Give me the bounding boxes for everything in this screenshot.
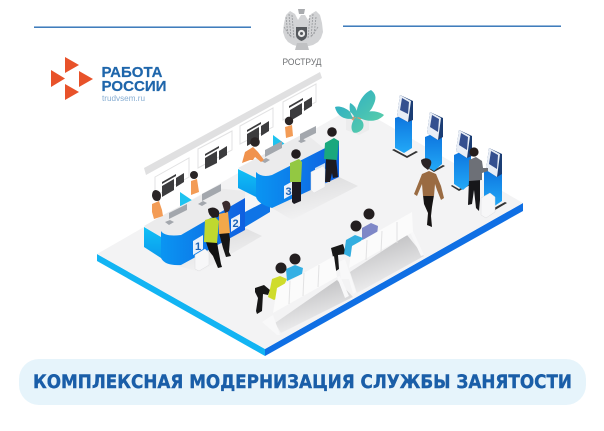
logo wordmark line 2: РОССИИ bbox=[102, 78, 166, 95]
kiosk 3 bbox=[451, 130, 472, 191]
bench 2 bbox=[331, 208, 424, 294]
clerk 4 bbox=[285, 117, 293, 138]
customer in lime bbox=[290, 149, 302, 204]
banner pill bbox=[19, 359, 586, 405]
floor platform bbox=[97, 106, 523, 356]
counter blue front bbox=[161, 198, 245, 265]
logo wordmark line 1: РАБОТА bbox=[102, 64, 163, 81]
logo: Работа России bbox=[51, 57, 166, 103]
bench back bbox=[349, 212, 413, 268]
gap blue strip bbox=[245, 199, 270, 227]
sign panel 1 bbox=[155, 158, 189, 197]
waiting stool bbox=[311, 166, 325, 193]
counter blue front bbox=[256, 141, 339, 208]
sign panel 4 bbox=[283, 84, 316, 121]
sitter in purple bbox=[362, 208, 378, 240]
customer in yellow bbox=[204, 208, 222, 268]
kiosk 4 bbox=[484, 148, 507, 210]
logo url: trudvsem.ru bbox=[102, 94, 145, 103]
kiosk stool bbox=[481, 193, 495, 218]
right counter bbox=[238, 126, 358, 220]
emblem label: РОСТРУД bbox=[282, 57, 322, 67]
customer in green bbox=[324, 127, 339, 182]
bench slats bbox=[366, 222, 397, 260]
kiosk 1 bbox=[392, 95, 418, 158]
isometric service hall bbox=[97, 72, 523, 356]
bench slats bbox=[289, 265, 319, 304]
icon: potted plant bbox=[335, 90, 384, 135]
bench back bbox=[273, 256, 337, 313]
walking man in brown bbox=[414, 158, 444, 227]
sign panel 2 bbox=[198, 131, 232, 169]
counter top surface bbox=[238, 133, 326, 178]
counter number 2: 2 bbox=[232, 218, 239, 230]
counter floor shadow bbox=[178, 228, 262, 272]
kiosks bbox=[392, 95, 507, 210]
monitors bbox=[261, 126, 316, 163]
counter top surface bbox=[144, 188, 245, 237]
gap panel bbox=[245, 184, 270, 212]
bench shadow bbox=[275, 280, 353, 333]
title banner bbox=[19, 359, 586, 405]
screen partition bbox=[273, 135, 293, 157]
top right rule bbox=[343, 26, 561, 27]
sitter in yellow bbox=[255, 262, 287, 314]
kiosk 2 bbox=[425, 112, 445, 172]
bench 1 bbox=[255, 254, 353, 335]
counter number 4: 4 bbox=[317, 166, 323, 177]
sitter in cyan bbox=[286, 254, 303, 281]
wall shelf bbox=[144, 72, 322, 175]
bench shadow bbox=[350, 235, 424, 293]
sign panel 3 bbox=[240, 108, 273, 146]
customer at kiosk bbox=[468, 147, 495, 218]
bench legs bbox=[339, 229, 424, 294]
counter number 1: 1 bbox=[195, 241, 201, 253]
counter cyan end bbox=[144, 227, 161, 258]
counter floor shadow bbox=[272, 177, 358, 220]
bench legs bbox=[262, 276, 349, 335]
screen partition bbox=[180, 192, 199, 206]
counter number 3: 3 bbox=[285, 186, 292, 198]
clerk 3 bbox=[242, 137, 264, 163]
monitors bbox=[165, 184, 221, 225]
sitter in cyan bbox=[331, 220, 363, 271]
customer in orange bbox=[219, 201, 231, 257]
clerk 1 bbox=[152, 190, 163, 219]
clerk 2 bbox=[190, 171, 199, 195]
counter cyan end bbox=[238, 169, 256, 197]
icon: Rostrud emblem bbox=[283, 9, 323, 50]
icon: logo triangles bbox=[51, 57, 93, 100]
top left rule bbox=[34, 26, 251, 28]
left counter bbox=[144, 184, 270, 272]
customer stool bbox=[195, 249, 209, 271]
